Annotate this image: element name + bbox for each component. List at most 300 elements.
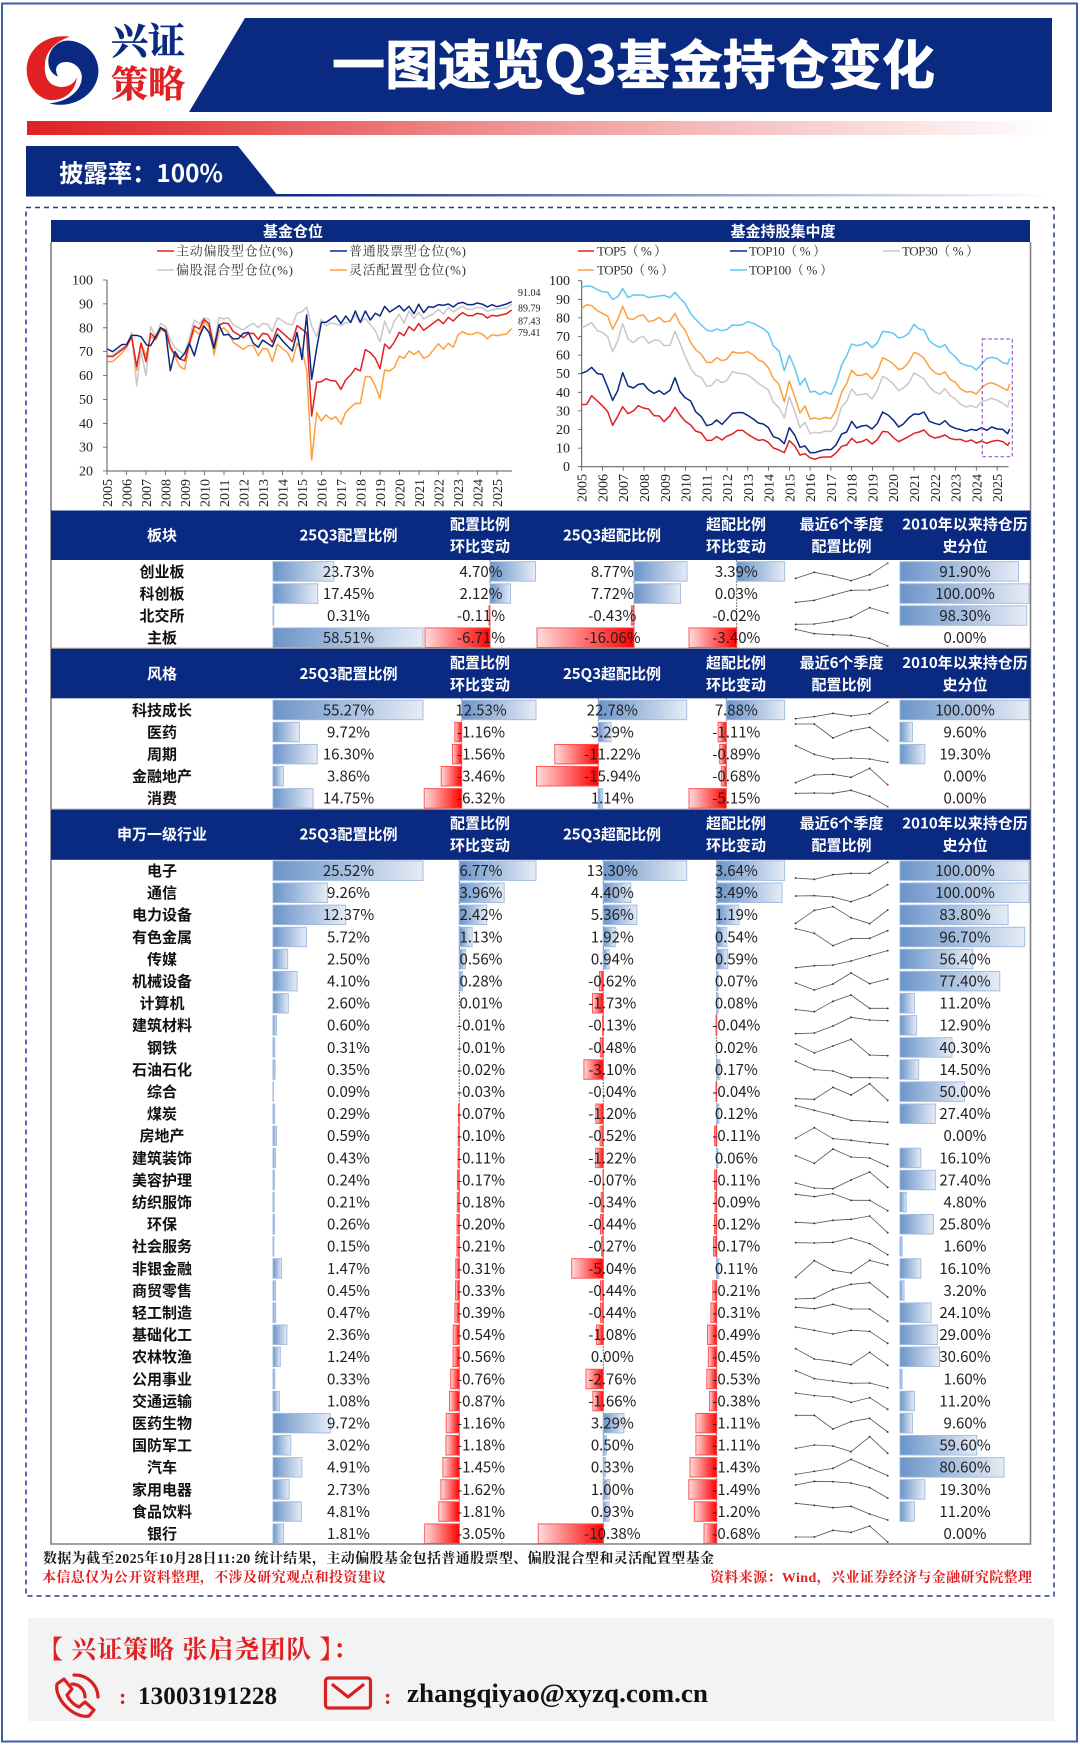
row: 医药: -1.11% xyxy=(712,721,761,742)
row: 钢铁 xyxy=(147,1037,991,1058)
title: 一图速览Q3基金持仓变化 xyxy=(332,24,935,100)
header row: 申万一级行业: 配置比例 xyxy=(450,812,510,834)
row: 计算机: 0.01% xyxy=(460,993,503,1014)
row: 非银金融 xyxy=(132,1258,991,1279)
row: 农林牧渔: 0.00% xyxy=(591,1346,634,1367)
row: 科技成长: 22.78% xyxy=(587,699,638,720)
header row: 风格: 配置比例 xyxy=(811,674,872,695)
row: 房地产: -0.10% xyxy=(457,1125,505,1146)
row: 房地产: 房地产 xyxy=(139,1125,185,1146)
row: 环保: 25.80% xyxy=(939,1214,991,1235)
row: 北交所: 98.30% xyxy=(939,605,991,626)
row: 创业板: 23.73% xyxy=(323,561,374,582)
row: 建筑装饰 xyxy=(132,1147,991,1168)
row: 家用电器: 1.00% xyxy=(591,1479,634,1500)
axes: 20 xyxy=(556,423,570,438)
row: 通信: 3.96% xyxy=(460,882,503,903)
row: 公用事业: -0.76% xyxy=(457,1368,505,1389)
row: 创业板: 3.39% xyxy=(715,561,758,582)
row: 电力设备: 电力设备 xyxy=(132,904,192,925)
row: 美容护理: 美容护理 xyxy=(132,1169,192,1190)
row: 石油石化: -0.02% xyxy=(457,1059,505,1080)
row: 交通运输: -1.66% xyxy=(588,1390,637,1411)
row: 银行: 1.81% xyxy=(327,1523,370,1544)
row: 交通运输: 交通运输 xyxy=(132,1390,192,1411)
chart band header xyxy=(51,220,1030,242)
row: 汽车: 4.91% xyxy=(327,1457,370,1478)
legend: fund positions xyxy=(157,244,466,278)
row: 农林牧渔: -0.45% xyxy=(712,1346,761,1367)
axes: 2016 xyxy=(804,474,819,502)
row: 通信 xyxy=(147,882,1029,903)
table frame xyxy=(51,242,1030,1544)
row: 银行: -10.38% xyxy=(584,1523,641,1544)
row: 建筑材料 xyxy=(132,1015,991,1036)
row: 电子: 3.64% xyxy=(715,860,758,881)
row: 非银金融: -0.31% xyxy=(457,1258,505,1279)
row: 石油石化: 0.35% xyxy=(327,1059,370,1080)
row: 通信: 100.00% xyxy=(935,882,995,903)
row: 创业板: 91.90% xyxy=(939,561,991,582)
row: 计算机: 11.20% xyxy=(939,993,991,1014)
row: 通信: 4.40% xyxy=(591,882,634,903)
row: 主板: 0.00% xyxy=(944,627,987,648)
row: 机械设备: 4.10% xyxy=(327,971,370,992)
row: 环保: -0.20% xyxy=(457,1214,505,1235)
row: 主板: -16.06% xyxy=(584,627,641,648)
row: 医药: 3.29% xyxy=(591,721,634,742)
row: 机械设备: 机械设备 xyxy=(132,971,192,992)
row: 电子 xyxy=(147,860,1029,881)
row: 传媒 xyxy=(147,948,991,969)
logo text: 兴证 xyxy=(111,11,185,65)
row: 电力设备 xyxy=(132,904,1008,925)
axes: 2017 xyxy=(825,474,840,502)
row: 石油石化 xyxy=(132,1059,991,1080)
row: 科创板: 100.00% xyxy=(935,583,995,604)
header row: 申万一级行业: 环比变动 xyxy=(450,834,510,856)
row: 纺织服饰: -0.18% xyxy=(457,1191,505,1212)
row: 美容护理 xyxy=(132,1169,991,1190)
row: 汽车: 80.60% xyxy=(939,1457,991,1478)
header row: 申万一级行业: 25Q3超配比例 xyxy=(563,824,661,844)
end value labels xyxy=(518,288,540,339)
row: 建筑装饰: 16.10% xyxy=(939,1147,991,1168)
row: 美容护理: 27.40% xyxy=(939,1169,991,1190)
header row: 板块: 25Q3配置比例 xyxy=(299,524,398,546)
row: 计算机 xyxy=(139,993,991,1014)
row: 商贸零售 xyxy=(132,1280,987,1301)
row: 纺织服饰: -0.34% xyxy=(588,1191,637,1212)
row: 煤炭: 煤炭 xyxy=(147,1103,177,1124)
header row: 板块: 环比变动 xyxy=(450,536,510,556)
dashed content frame xyxy=(26,208,1054,1596)
row: 医药 xyxy=(147,721,987,742)
row: 汽车: 0.33% xyxy=(591,1457,634,1478)
row: 家用电器: -1.62% xyxy=(457,1479,505,1500)
row: 消费: -6.32% xyxy=(457,788,505,809)
row: 周期: -11.22% xyxy=(584,744,641,765)
row: 有色金属: 96.70% xyxy=(939,926,991,947)
row: 周期: 周期 xyxy=(147,744,177,765)
row: 农林牧渔: 1.24% xyxy=(327,1346,370,1367)
row: 银行 xyxy=(147,1523,987,1544)
sparklines: 风格 xyxy=(796,702,888,807)
row: 国防军工: 59.60% xyxy=(939,1435,991,1456)
row: 建筑装饰: 建筑装饰 xyxy=(132,1147,192,1168)
row: 国防军工: 3.02% xyxy=(327,1435,370,1456)
row: 纺织服饰: 4.80% xyxy=(944,1191,987,1212)
legend: holding concentration xyxy=(578,244,979,278)
row: 科创板: 2.12% xyxy=(460,583,503,604)
row: 科技成长: 100.00% xyxy=(935,699,995,720)
row: 电子: 13.30% xyxy=(587,860,638,881)
row: 社会服务 xyxy=(132,1236,987,1257)
row: 家用电器 xyxy=(132,1479,991,1500)
row: 环保: 环保 xyxy=(147,1214,177,1235)
header row: 风格 xyxy=(51,649,1030,698)
row: 轻工制造: -0.31% xyxy=(712,1302,761,1323)
row: 电力设备: 2.42% xyxy=(460,904,503,925)
row: 计算机: 2.60% xyxy=(327,993,370,1014)
row: 轻工制造: 0.47% xyxy=(327,1302,370,1323)
section heading: disclosure rate xyxy=(26,146,1052,196)
row: 非银金融: -5.04% xyxy=(588,1258,637,1279)
legend: holding concentration: TOP30（ % ） xyxy=(902,244,979,258)
row: 周期: -1.56% xyxy=(457,744,505,765)
axes: 2010 xyxy=(680,474,694,502)
row: 机械设备: 0.28% xyxy=(460,971,503,992)
row: 计算机: 0.08% xyxy=(715,993,758,1014)
row: 环保: -0.12% xyxy=(712,1214,761,1235)
row: 综合: 50.00% xyxy=(939,1081,991,1102)
axes: 2013 xyxy=(257,479,272,507)
row: 社会服务: 社会服务 xyxy=(132,1236,192,1257)
header row: 申万一级行业: 申万一级行业 xyxy=(117,824,207,844)
axes: 40 xyxy=(79,417,93,432)
axes: 2017 xyxy=(335,479,350,507)
axes: 2020 xyxy=(394,479,408,507)
sparklines: 申万一级行业 upper xyxy=(796,862,888,1144)
header row: 申万一级行业: 2010年以来持仓历 xyxy=(902,812,1028,834)
row: 医药: 医药 xyxy=(147,721,177,742)
row: 消费: 1.14% xyxy=(591,788,634,809)
row: 金融地产: 0.00% xyxy=(944,766,987,787)
row: 食品饮料: 0.93% xyxy=(591,1501,634,1522)
row: 有色金属: 1.13% xyxy=(460,926,503,947)
row: 非银金融: 1.47% xyxy=(327,1258,370,1279)
row: 汽车 xyxy=(147,1457,1004,1478)
row: 北交所 xyxy=(139,605,1027,626)
row: 交通运输: 1.08% xyxy=(327,1390,370,1411)
row: 国防军工: -1.18% xyxy=(457,1435,505,1456)
phone number: : xyxy=(119,1684,126,1709)
row: 电力设备: 5.36% xyxy=(591,904,634,925)
footnote: disclaimer: 本信息仅为公开资料整理，不涉及研究观点和投资建议 xyxy=(42,1569,386,1586)
row: 房地产: 0.00% xyxy=(944,1125,987,1146)
line series: fund positions xyxy=(107,302,512,460)
row: 房地产 xyxy=(139,1125,987,1146)
axes: 2006 xyxy=(120,479,136,507)
chart band header: 基金持股集中度 xyxy=(730,220,836,242)
row: 创业板: 4.70% xyxy=(460,561,503,582)
row: 农林牧渔: -0.56% xyxy=(457,1346,505,1367)
row: 家用电器: -1.49% xyxy=(712,1479,761,1500)
row: 轻工制造: 轻工制造 xyxy=(132,1302,192,1323)
axes xyxy=(549,274,1008,502)
row: 煤炭 xyxy=(147,1103,991,1124)
row: 计算机: 计算机 xyxy=(139,993,185,1014)
row: 医药生物: 3.29% xyxy=(591,1412,634,1433)
row: 主板: 主板 xyxy=(147,627,177,648)
axes: 90 xyxy=(79,297,93,312)
legend: holding concentration: TOP50（ % ） xyxy=(597,262,674,278)
row: 通信: 9.26% xyxy=(327,882,370,903)
row: 煤炭: 27.40% xyxy=(939,1103,991,1124)
axes: 2005 xyxy=(101,479,116,507)
gradient divider bar xyxy=(27,121,1052,135)
header row: 板块: 2010年以来持仓历 xyxy=(902,514,1028,534)
row: 商贸零售: -0.44% xyxy=(588,1280,637,1301)
header row: 板块: 环比变动 xyxy=(706,536,766,556)
row: 商贸零售: -0.21% xyxy=(712,1280,761,1301)
row: 美容护理: -0.17% xyxy=(457,1169,505,1190)
row: 银行: -3.05% xyxy=(457,1523,505,1544)
icon: phone xyxy=(57,1675,98,1716)
logo text: 策略 xyxy=(111,54,185,108)
header row: 申万一级行业: 25Q3配置比例 xyxy=(299,824,398,844)
row: 煤炭: -1.20% xyxy=(588,1103,637,1124)
row: 轻工制造 xyxy=(132,1302,991,1323)
row: 电力设备: 12.37% xyxy=(323,904,374,925)
row: 消费: 消费 xyxy=(147,788,177,809)
row: 有色金属: 有色金属 xyxy=(132,926,192,947)
row: 电力设备: 1.19% xyxy=(715,904,758,925)
row: 非银金融: 16.10% xyxy=(939,1258,991,1279)
row: 金融地产: -15.94% xyxy=(584,766,641,787)
row: 钢铁: 40.30% xyxy=(939,1037,991,1058)
row: 科技成长: 科技成长 xyxy=(132,699,192,720)
row: 煤炭: 0.29% xyxy=(327,1103,370,1124)
row: 科创板: 0.03% xyxy=(715,583,758,604)
row: 社会服务: 0.15% xyxy=(327,1236,370,1257)
chart: fund positions xyxy=(72,244,540,507)
sparklines: 申万一级行业 lower xyxy=(796,1437,888,1542)
row: 商贸零售: 3.20% xyxy=(944,1280,987,1301)
row: 非银金融: 非银金融 xyxy=(132,1258,192,1279)
axes: 2015 xyxy=(783,474,798,502)
end value labels: 91.04 xyxy=(518,288,540,299)
axes: 2014 xyxy=(763,474,778,502)
header row: 风格: 最近6个季度 xyxy=(800,652,883,673)
row: 金融地产: -0.68% xyxy=(712,766,761,787)
row: 综合 xyxy=(147,1081,991,1102)
row: 商贸零售: 0.45% xyxy=(327,1280,370,1301)
row: 主板 xyxy=(147,627,987,648)
row: 石油石化: 石油石化 xyxy=(132,1059,192,1080)
phone number: 13003191228 xyxy=(138,1683,277,1710)
row: 传媒: 0.59% xyxy=(715,948,758,969)
row: 家用电器: 19.30% xyxy=(939,1479,991,1500)
axes: 80 xyxy=(79,321,93,336)
row: 消费: 0.00% xyxy=(944,788,987,809)
row: 金融地产: -3.46% xyxy=(457,766,505,787)
row: 电子: 100.00% xyxy=(935,860,995,881)
row: 综合: -0.03% xyxy=(457,1081,505,1102)
row: 科技成长 xyxy=(132,699,1029,720)
row: 纺织服饰: -0.09% xyxy=(712,1191,761,1212)
chart band header: 基金仓位 xyxy=(263,220,323,242)
axes: 2025 xyxy=(491,479,506,507)
row: 国防军工: -1.11% xyxy=(712,1435,761,1456)
row: 医药: 9.60% xyxy=(944,721,987,742)
row: 基础化工: -1.08% xyxy=(588,1324,637,1345)
email: : xyxy=(384,1684,391,1709)
axes: 50 xyxy=(556,367,570,382)
axes: 2022 xyxy=(929,474,944,502)
row: 通信: 3.49% xyxy=(715,882,758,903)
axes: 90 xyxy=(556,293,570,308)
row: 石油石化: 0.17% xyxy=(715,1059,758,1080)
row: 科创板: 科创板 xyxy=(139,583,185,604)
row: 周期: -0.89% xyxy=(712,744,761,765)
icon: swirl logo xyxy=(27,36,98,105)
row: 科技成长: 55.27% xyxy=(323,699,374,720)
row: 科创板 xyxy=(139,583,1029,604)
axes: 2018 xyxy=(354,479,370,507)
row: 社会服务: 1.60% xyxy=(944,1236,987,1257)
axes: 2023 xyxy=(950,474,964,502)
legend: holding concentration: TOP5（ % ） xyxy=(597,244,667,258)
panel: charts xyxy=(51,220,1030,507)
header row: 板块: 25Q3超配比例 xyxy=(563,524,661,546)
row: 主板: -6.71% xyxy=(457,627,505,648)
row: 金融地产 xyxy=(132,766,987,787)
legend: holding concentration: TOP100（ % ） xyxy=(749,262,833,278)
axes: 70 xyxy=(79,345,93,360)
panel: contact xyxy=(28,1618,1054,1721)
axes: 2006 xyxy=(596,474,612,502)
row: 食品饮料: -1.20% xyxy=(712,1501,761,1522)
section heading: disclosure rate: 披露率：100% xyxy=(59,155,223,190)
legend: holding concentration: TOP10（ % ） xyxy=(749,244,826,258)
row: 交通运输: -0.38% xyxy=(712,1390,761,1411)
row: 建筑材料: -0.04% xyxy=(712,1015,761,1036)
axes: 2016 xyxy=(316,479,330,507)
row: 钢铁: -0.48% xyxy=(588,1037,637,1058)
row: 医药生物: -1.16% xyxy=(457,1412,505,1433)
row: 家用电器: 2.73% xyxy=(327,1479,370,1500)
row: 国防军工: 国防军工 xyxy=(132,1435,192,1456)
row: 建筑材料: 12.90% xyxy=(939,1015,991,1036)
row: 石油石化: 14.50% xyxy=(939,1059,991,1080)
row: 电力设备: 83.80% xyxy=(939,904,991,925)
axes: 2020 xyxy=(887,474,902,502)
axes: 70 xyxy=(556,330,570,345)
axes: 100 xyxy=(72,274,93,288)
row: 轻工制造: -0.44% xyxy=(588,1302,637,1323)
axes: 100 xyxy=(549,274,570,289)
row: 创业板 xyxy=(139,561,1018,582)
header row: 板块: 配置比例 xyxy=(811,536,872,556)
row: 计算机: -1.73% xyxy=(588,993,637,1014)
row: 建筑装饰: -0.11% xyxy=(457,1147,505,1168)
row: 食品饮料: 11.20% xyxy=(939,1501,991,1522)
row: 电子: 25.52% xyxy=(323,860,374,881)
footnote: data note: 数据为截至2025年10月28日11:20 统计结果，主动偏股基金包括普通股票型、偏股混合型和灵活配置型基金 xyxy=(43,1550,714,1567)
header row: 风格: 风格 xyxy=(147,663,177,684)
row: 建筑材料: 建筑材料 xyxy=(132,1015,192,1036)
row: 传媒: 0.56% xyxy=(460,948,503,969)
end value labels: 79.41 xyxy=(518,328,540,339)
axes: 2023 xyxy=(452,479,467,507)
row: 机械设备: 0.07% xyxy=(715,971,758,992)
axes: 2011 xyxy=(218,480,233,507)
logo text xyxy=(111,11,185,108)
row: 基础化工 xyxy=(132,1324,991,1345)
row: 建筑装饰: 0.06% xyxy=(715,1147,758,1168)
axes: 50 xyxy=(79,393,93,408)
axes: 2021 xyxy=(413,479,428,507)
header row: 风格: 2010年以来持仓历 xyxy=(902,652,1028,673)
row: 家用电器: 家用电器 xyxy=(132,1479,192,1500)
axes: 2012 xyxy=(721,474,736,502)
row: 科创板: 7.72% xyxy=(591,583,634,604)
row: 煤炭: 0.12% xyxy=(715,1103,758,1124)
row: 国防军工 xyxy=(132,1435,991,1456)
row: 美容护理: -0.07% xyxy=(588,1169,637,1190)
axes: 2014 xyxy=(276,479,292,507)
row: 房地产: -0.52% xyxy=(588,1125,637,1146)
table block: 板块 xyxy=(51,510,1030,648)
row: 周期 xyxy=(147,744,991,764)
end value labels: 87.43 xyxy=(518,316,540,328)
highlight: recent quarters box xyxy=(982,339,1012,457)
row: 有色金属: 0.54% xyxy=(715,926,758,947)
header row: 板块: 史分位 xyxy=(942,536,988,556)
axes: 60 xyxy=(556,349,570,364)
row: 科技成长: 7.88% xyxy=(715,699,758,720)
row: 有色金属: 1.92% xyxy=(591,926,634,947)
row: 金融地产: 金融地产 xyxy=(132,766,192,787)
row: 食品饮料: -1.81% xyxy=(457,1501,505,1522)
row: 建筑装饰: -1.22% xyxy=(588,1147,637,1168)
row: 基础化工: 基础化工 xyxy=(132,1324,192,1345)
row: 国防军工: 0.50% xyxy=(591,1435,634,1456)
row: 轻工制造: -0.39% xyxy=(457,1302,505,1323)
axes: 2008 xyxy=(638,474,653,502)
header row: 风格: 环比变动 xyxy=(706,674,766,695)
row: 公用事业: 0.33% xyxy=(327,1368,370,1389)
header row: 板块: 最近6个季度 xyxy=(800,514,883,534)
row: 科创板: 17.45% xyxy=(323,583,374,604)
header row: 板块: 超配比例 xyxy=(706,514,766,534)
row: 房地产: 0.59% xyxy=(327,1125,370,1146)
row: 电子: 6.77% xyxy=(460,860,503,881)
row: 交通运输: -0.87% xyxy=(457,1390,505,1411)
row: 农林牧渔: 农林牧渔 xyxy=(132,1346,192,1367)
row: 商贸零售: 商贸零售 xyxy=(132,1280,192,1301)
header row: 风格: 环比变动 xyxy=(450,674,510,695)
row: 通信: 通信 xyxy=(147,882,177,903)
row: 纺织服饰: 0.21% xyxy=(327,1191,370,1212)
team name: 【 兴证策略 张启尧团队 】： xyxy=(38,1636,358,1664)
row: 公用事业: 1.60% xyxy=(944,1368,987,1389)
axes: 2025 xyxy=(991,474,1006,502)
row: 建筑装饰: 0.43% xyxy=(327,1147,370,1168)
header row: 板块: 板块 xyxy=(147,524,177,546)
logo xyxy=(27,11,185,108)
